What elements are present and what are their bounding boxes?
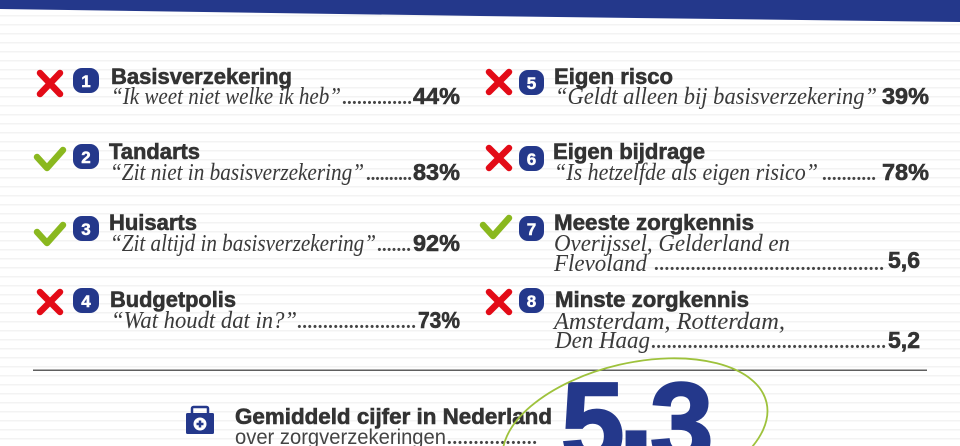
number badge 2 <box>73 144 99 169</box>
item 3: Huisarts <box>37 210 460 257</box>
number badge 1: 1 <box>81 72 91 91</box>
regions line 2: Den Haag <box>554 328 650 354</box>
quote: “Is hetzelfde als eigen risico” <box>554 160 818 186</box>
quote: “Ik weet niet welke ik heb” <box>111 84 341 110</box>
item 6: Eigen bijdrage <box>489 139 929 186</box>
dot leader: ........... <box>822 164 876 185</box>
green ellipse <box>488 334 782 446</box>
score: 5,6 <box>888 247 920 273</box>
dot leader: ............................................. <box>651 332 886 353</box>
heading: Huisarts <box>109 210 197 235</box>
icon: medical case <box>186 407 214 434</box>
heading: Gemiddeld cijfer in Nederland <box>235 404 552 429</box>
number badge 4 <box>73 288 99 313</box>
dot leader: .......... <box>366 164 412 185</box>
item 2: Tandarts <box>37 139 460 186</box>
number badge 5 <box>519 70 544 95</box>
heading: Tandarts <box>109 139 200 164</box>
score: 5,2 <box>888 327 920 353</box>
quote: “Zit niet in basisverzekering” <box>110 160 364 186</box>
number badge 3: 3 <box>81 220 91 239</box>
heading: Meeste zorgkennis <box>554 210 754 235</box>
percentage: 78% <box>882 159 929 185</box>
dot leader: ....... <box>377 235 411 256</box>
icon: red cross <box>40 73 60 94</box>
icon: green check <box>37 225 63 243</box>
regions: Amsterdam, Rotterdam, <box>552 309 785 335</box>
icon: red cross <box>489 292 509 312</box>
icon: green check <box>37 150 63 168</box>
regions: Overijssel, Gelderland en <box>554 231 790 257</box>
heading: Minste zorgkennis <box>555 287 749 312</box>
item 4: Budgetpolis <box>40 287 460 334</box>
dot leader: ....................... <box>297 312 416 333</box>
icon: red cross <box>40 292 60 312</box>
item 8: Minste zorgkennis <box>489 287 920 354</box>
dot leader: .............. <box>342 88 412 109</box>
item 7: Meeste zorgkennis <box>483 210 920 277</box>
number badge 1 <box>73 68 99 93</box>
percentage: 83% <box>413 159 460 185</box>
quote: “Geldt alleen bij basisverzekering” <box>555 84 877 110</box>
percentage: 73% <box>418 307 460 333</box>
percentage: 92% <box>413 230 460 256</box>
dot leader: ............................................ <box>654 254 884 275</box>
quote: “Wat houdt dat in?” <box>111 308 297 334</box>
average score section <box>186 333 782 446</box>
percentage: 44% <box>413 83 460 109</box>
number badge 3 <box>73 216 99 241</box>
number badge 2: 2 <box>81 148 91 167</box>
heading: Budgetpolis <box>110 287 236 312</box>
icon: red cross <box>489 72 509 92</box>
big score <box>561 333 713 446</box>
number badge 4: 4 <box>81 292 91 311</box>
number badge 7 <box>519 216 544 241</box>
item 1: Basisverzekering <box>40 64 460 110</box>
item 5: Eigen risco <box>489 64 929 110</box>
number badge 8: 8 <box>527 292 536 311</box>
heading: Basisverzekering <box>111 64 292 89</box>
number badge 7: 7 <box>527 220 536 239</box>
number badge 8 <box>519 288 544 313</box>
number badge 5: 5 <box>527 74 536 93</box>
percentage: 39% <box>882 83 929 109</box>
top blue band <box>0 0 960 22</box>
number badge 6 <box>519 146 544 171</box>
quote: “Zit altijd in basisverzekering” <box>110 231 376 257</box>
icon: red cross <box>489 148 509 168</box>
heading: Eigen bijdrage <box>553 139 705 164</box>
icon: green check <box>483 218 509 236</box>
heading: Eigen risco <box>554 64 673 89</box>
regions line 2: Flevoland <box>553 251 648 277</box>
number badge 6: 6 <box>527 150 536 169</box>
